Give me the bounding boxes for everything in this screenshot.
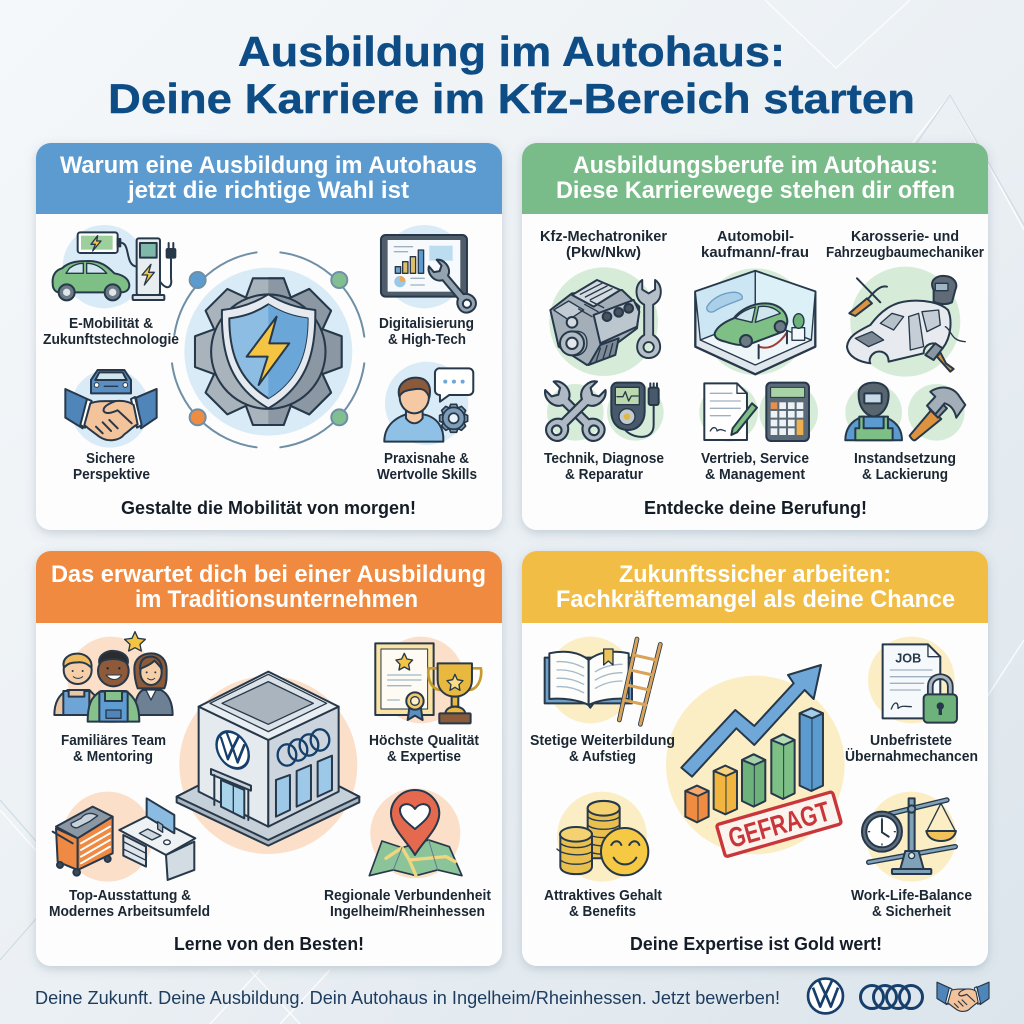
label: attraktives gehalt (544, 887, 662, 920)
label: höchste qualität: Höchste Qualität (369, 732, 479, 749)
icon: job contract with lock (868, 637, 957, 723)
label: work-life-balance: & Sicherheit (872, 903, 951, 920)
panel header: traditionsunternehmen: Das erwartet dich bei einer Ausbildung (51, 561, 486, 588)
caption: Gestalte die Mobilität von morgen! (121, 498, 416, 518)
icon: tool trolley and desk (53, 792, 195, 882)
label: vertrieb: & Management (705, 466, 805, 483)
icon: e-mobility car and charger (53, 225, 175, 308)
icon: hammer (908, 384, 965, 441)
icon: crossed wrenches (541, 378, 609, 446)
icon: book and ladder (545, 637, 660, 724)
title (108, 28, 915, 122)
icon: person with speech bubble and gear (384, 362, 473, 445)
icon: calculator (759, 383, 818, 442)
panel: traditionsunternehmen (36, 551, 502, 966)
icon: job contract with lock: JOB (895, 651, 921, 665)
label: digitalisierung (379, 315, 474, 348)
panel header: ausbildungsberufe (522, 143, 988, 214)
label: unbefristete: Unbefristete (870, 732, 952, 749)
label: instandsetzung: & Lackierung (862, 466, 948, 483)
icon: certificate and trophy (375, 637, 481, 723)
label: vertrieb (701, 450, 809, 483)
label: regionale verbundenheit (324, 887, 491, 920)
title: Ausbildung im Autohaus: (238, 28, 785, 75)
label: technik (544, 450, 664, 483)
label: familiäres team: & Mentoring (73, 748, 153, 765)
logo: audi rings (860, 986, 922, 1008)
label: attraktives gehalt: Attraktives Gehalt (544, 887, 662, 904)
icon: tablet with wrench (381, 225, 480, 317)
logo: vw (808, 979, 843, 1013)
label: e-mobilität: E-Mobilität & (69, 315, 153, 332)
label: stetige weiterbildung: Stetige Weiterbildung (530, 732, 675, 749)
icon: engine and wrench (549, 267, 661, 376)
icon: footer handshake (937, 982, 989, 1011)
caption: Entdecke deine Berufung! (644, 498, 867, 518)
icon: car body with welding tools (847, 267, 965, 377)
label: stetige weiterbildung (530, 732, 675, 765)
label: höchste qualität: & Expertise (387, 748, 461, 765)
label: digitalisierung: & High-Tech (388, 331, 466, 348)
panel: ausbildungsberufe (522, 143, 988, 530)
label: karosserie: Fahrzeugbaumechaniker (826, 244, 984, 261)
label: e-mobilität: Zukunftstechnologie (43, 331, 179, 348)
label: digitalisierung: Digitalisierung (379, 315, 474, 332)
label: praxisnahe: Wertvolle Skills (377, 466, 477, 483)
panel: warum Ausbildung (36, 143, 502, 530)
central gear and shield illustration (172, 252, 364, 447)
label: work-life-balance: Work-Life-Balance (851, 887, 972, 904)
label: work-life-balance (851, 887, 972, 920)
label: top-ausstattung: Top-Ausstattung & (69, 887, 191, 904)
label: technik: & Reparatur (565, 466, 643, 483)
icon: coins and smiley (557, 792, 648, 882)
title: Deine Karriere im Kfz-Bereich starten (108, 75, 915, 122)
label: sichere perspektive: Sichere (86, 450, 135, 467)
icon: team with star (54, 632, 173, 723)
icon: car showroom (695, 268, 815, 375)
panel: zukunftssicher (522, 551, 988, 966)
panel header: warum (36, 143, 502, 214)
label: kfz-mechatroniker: (Pkw/Nkw) (566, 244, 641, 261)
label: automobilkaufmann (701, 228, 809, 261)
chart: rising bars, arrow and stamp (666, 665, 845, 857)
label: sichere perspektive (73, 450, 150, 483)
label: automobilkaufmann: Automobil- (717, 228, 794, 245)
panel header: traditionsunternehmen: im Traditionsunternehmen (135, 586, 418, 613)
illustration: dealership building (177, 672, 359, 854)
label: attraktives gehalt: & Benefits (569, 903, 636, 920)
label: familiäres team: Familiäres Team (61, 732, 166, 749)
label: praxisnahe: Praxisnahe & (384, 450, 469, 467)
label: automobilkaufmann: kaufmann/-frau (701, 244, 809, 261)
panel header: warum: Warum eine Ausbildung im Autohaus (60, 152, 477, 179)
label: regionale verbundenheit: Regionale Verbundenheit (324, 887, 491, 904)
icon: handshake with car (65, 369, 157, 448)
panel header: zukunftssicher (522, 551, 988, 623)
label: stetige weiterbildung: & Aufstieg (569, 748, 636, 765)
label: top-ausstattung (49, 887, 210, 920)
label: top-ausstattung: Modernes Arbeitsumfeld (49, 903, 210, 920)
label: instandsetzung (854, 450, 956, 483)
label: karosserie: Karosserie- und (851, 228, 959, 245)
label: unbefristete: Übernahmechancen (845, 748, 978, 765)
label: vertrieb: Vertrieb, Service (701, 450, 809, 467)
panel header: zukunftssicher: Fachkräftemangel als deine Chance (556, 586, 955, 613)
caption: Lerne von den Besten! (174, 934, 364, 954)
label: sichere perspektive: Perspektive (73, 466, 150, 483)
label: regionale verbundenheit: Ingelheim/Rheinhessen (330, 903, 485, 920)
label: e-mobilität (43, 315, 179, 348)
label: instandsetzung: Instandsetzung (854, 450, 956, 467)
label: kfz-mechatroniker: Kfz-Mechatroniker (540, 228, 667, 245)
panel header: traditionsunternehmen (36, 551, 502, 623)
panel header: warum: jetzt die richtige Wahl ist (127, 177, 409, 204)
chart: rising bars, arrow and stamp: GEFRAGT (725, 795, 833, 854)
icon: diagnostic device (607, 383, 664, 441)
icon: welder (845, 383, 902, 441)
panel header: zukunftssicher: Zukunftssicher arbeiten: (619, 561, 891, 588)
panel header: ausbildungsberufe: Diese Karrierewege stehen dir offen (556, 177, 955, 204)
label: praxisnahe (377, 450, 477, 483)
label: höchste qualität (369, 732, 479, 765)
panel header: ausbildungsberufe: Ausbildungsberufe im Autohaus: (573, 152, 938, 179)
icon: balance scale with clock (862, 792, 956, 882)
label: technik: Technik, Diagnose (544, 450, 664, 467)
label: unbefristete (845, 732, 978, 765)
footer text: Deine Zukunft. Deine Ausbildung. Dein Autohaus in Ingelheim/Rheinhessen. Jetzt bewerben! (35, 988, 780, 1008)
label: familiäres team (61, 732, 166, 765)
icon: contract and pen (699, 383, 758, 442)
caption: Deine Expertise ist Gold wert! (630, 934, 882, 954)
label: karosserie (826, 228, 984, 261)
icon: map pin with heart (369, 788, 462, 878)
label: kfz-mechatroniker (540, 228, 667, 261)
